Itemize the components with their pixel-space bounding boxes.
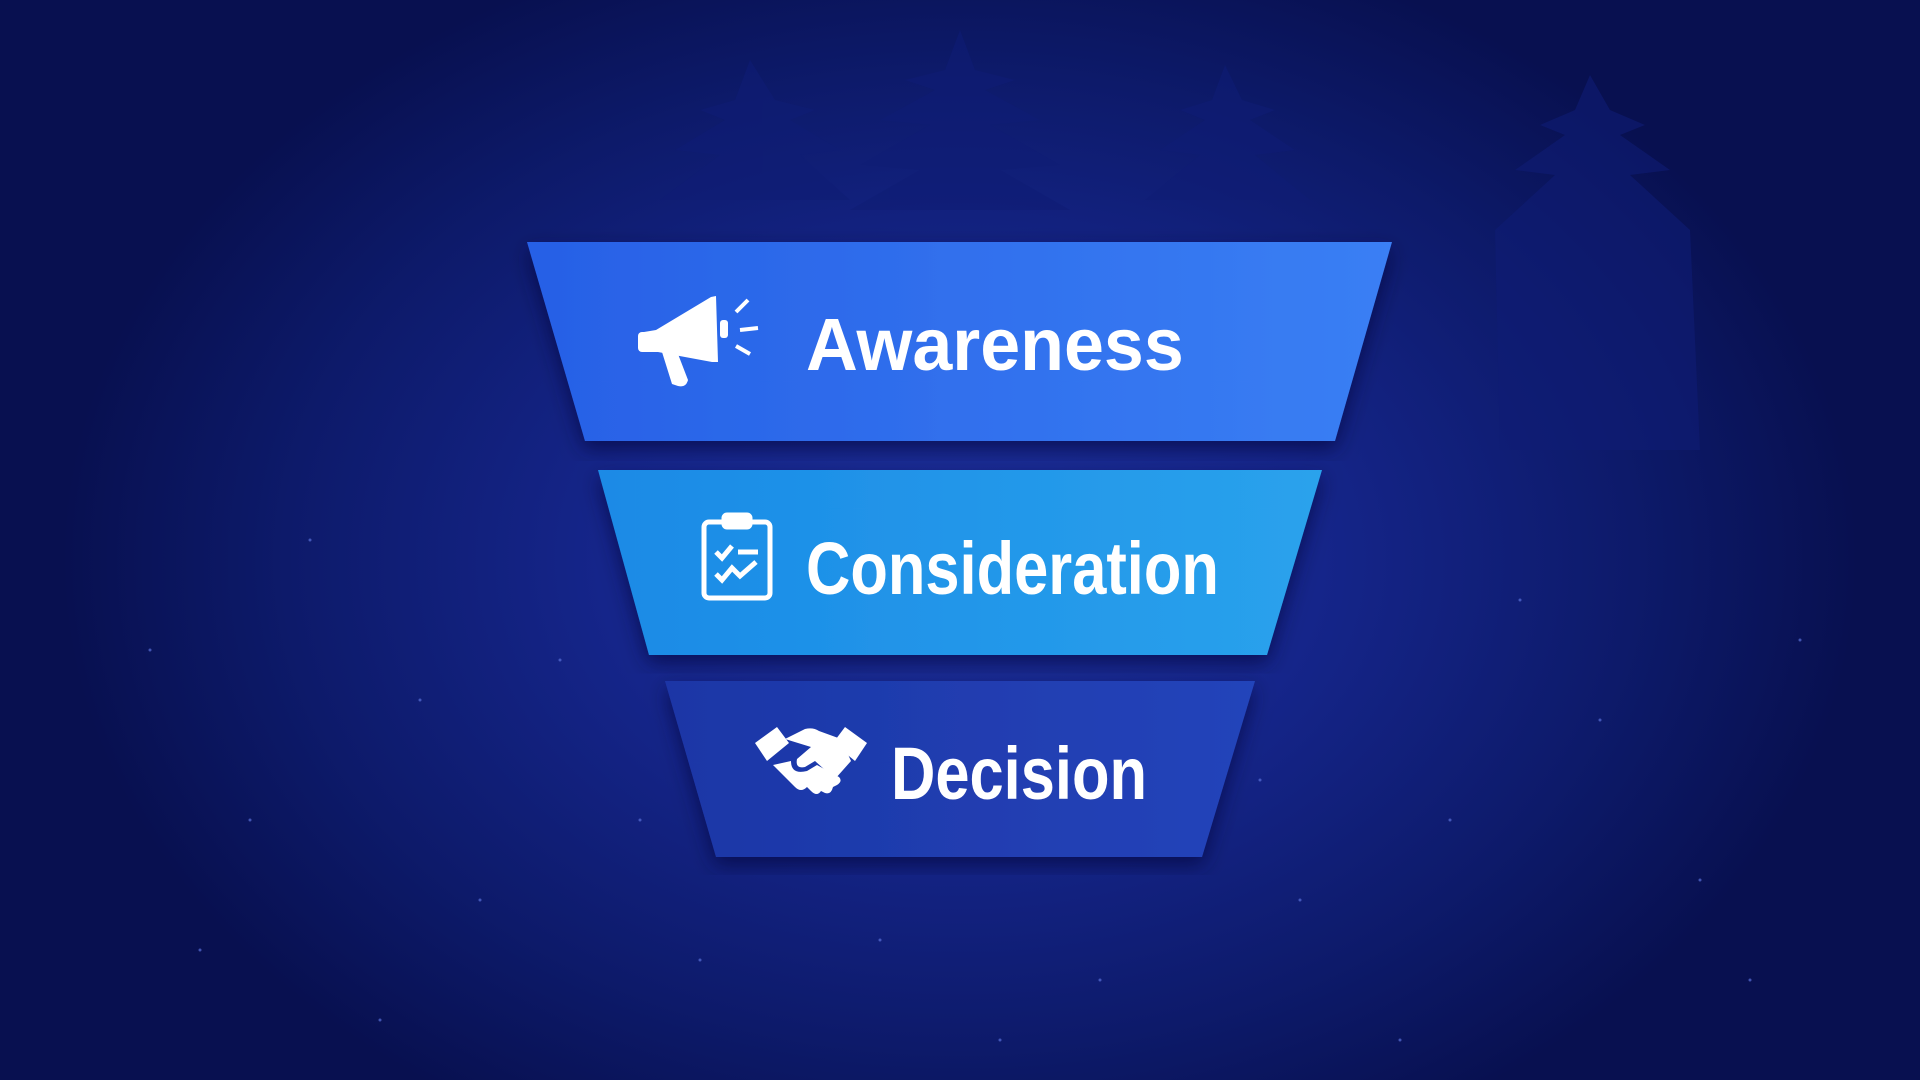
icon: megaphone (638, 296, 758, 386)
icon: clipboard (702, 512, 772, 600)
heading: Consideration: Consideration (806, 527, 1219, 610)
icon: handshake (755, 727, 867, 794)
panel: consideration (702, 512, 1219, 610)
heading: Awareness: Awareness (806, 303, 1184, 386)
panel: decision (755, 727, 1147, 815)
heading: Decision: Decision (891, 732, 1147, 815)
